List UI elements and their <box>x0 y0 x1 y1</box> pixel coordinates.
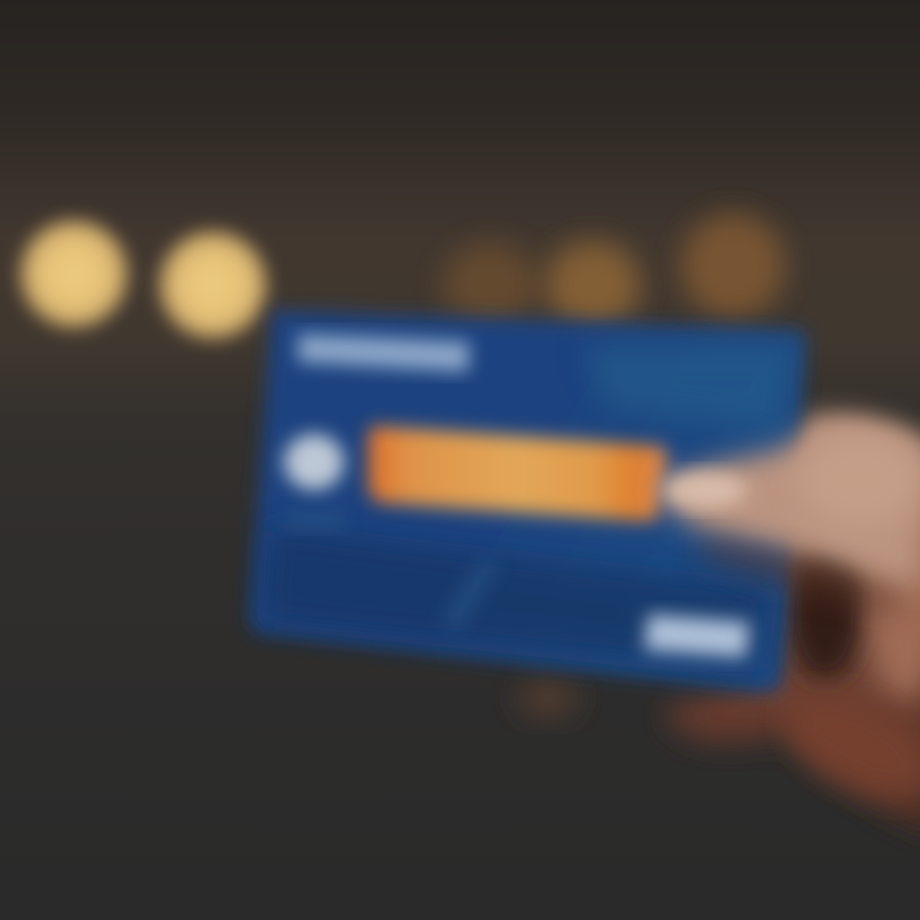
light: second yellow circle <box>159 231 267 339</box>
card diagonal sheen <box>440 560 500 630</box>
hand: lower finger <box>770 670 920 820</box>
card body <box>249 310 806 691</box>
light: left yellow circle <box>20 220 128 328</box>
bokeh lights <box>20 214 785 718</box>
thumb shape <box>664 424 920 590</box>
hand: lit wrist side <box>875 540 920 700</box>
hand thumb over card <box>663 424 920 615</box>
card: chip icon <box>284 434 344 490</box>
card: top logo text bar <box>298 334 470 372</box>
light: orange circle <box>545 241 641 329</box>
card darker lower band <box>265 530 770 670</box>
light: reflection below card <box>518 678 578 718</box>
light: right amber circle <box>681 214 785 318</box>
hand: palm and lower fingers <box>665 417 920 835</box>
card: orange strip <box>368 426 667 521</box>
credit card <box>249 310 806 691</box>
thumb underside shadow <box>700 540 900 615</box>
card: small text under chip <box>285 510 345 530</box>
hand: dark shadow under fingers <box>783 535 867 685</box>
thumb highlight <box>663 472 747 508</box>
knuckle shading <box>800 434 920 526</box>
card: brand logo bottom right <box>644 614 750 658</box>
card sheen, upper right <box>580 345 790 430</box>
hand behind card <box>665 417 920 835</box>
light: faint orange circle <box>442 243 538 327</box>
